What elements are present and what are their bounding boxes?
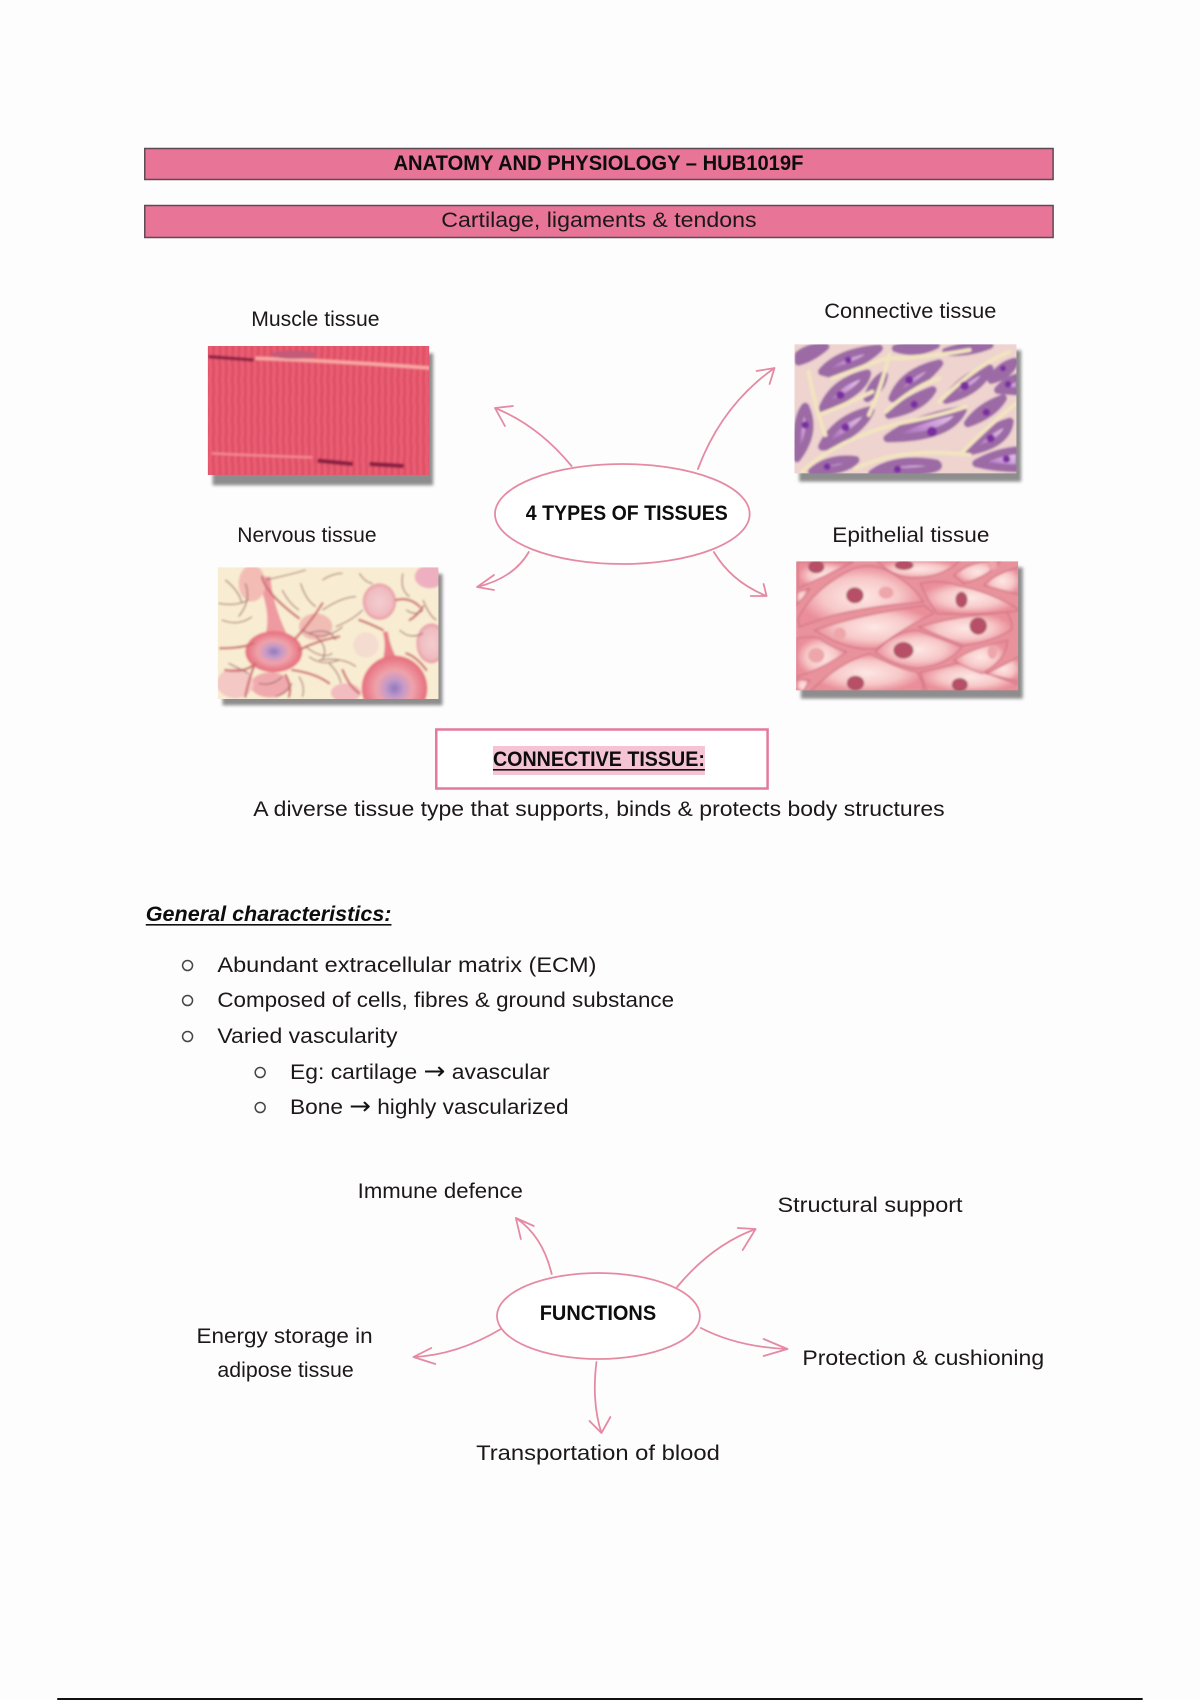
label: muscle tissue: Muscle tissue: [251, 308, 380, 331]
label: transportation of blood: Transportation of blood: [476, 1442, 720, 1465]
label: connective tissue: Connective tissue: [824, 300, 996, 323]
definition text: A diverse tissue type that supports, binds & protects body structures: [253, 798, 945, 821]
bullet: composition: Composed of cells, fibres & ground substance: [217, 989, 674, 1012]
image: connective tissue: [792, 342, 1021, 482]
arrow: to protection: [701, 1328, 787, 1356]
sub-bullet: bone: Bone → highly vascularized: [290, 1092, 569, 1120]
label: structural support: Structural support: [778, 1194, 963, 1217]
label: epithelial tissue: Epithelial tissue: [832, 524, 989, 547]
label: protection and cushioning: Protection & cushioning: [802, 1347, 1044, 1370]
title banner: ANATOMY AND PHYSIOLOGY – HUB1019F: [393, 152, 804, 175]
image: epithelial tissue: [793, 559, 1023, 699]
footer line: [57, 1698, 1143, 1700]
arrow: to structural support: [677, 1228, 756, 1287]
label: energy storage: Energy storage in: [197, 1325, 373, 1348]
list: general characteristics: [183, 954, 674, 1120]
arrow: to muscle tissue: [495, 406, 572, 466]
label: energy storage: adipose tissue: [217, 1359, 354, 1382]
title banner: [145, 148, 1053, 180]
heading box: connective tissue: CONNECTIVE TISSUE:: [493, 748, 705, 771]
bullet: vascularity: Varied vascularity: [217, 1025, 398, 1048]
label: immune defence: Immune defence: [358, 1180, 523, 1203]
center oval: functions: [497, 1273, 700, 1359]
heading box: connective tissue: [436, 730, 768, 788]
arrow: to nervous tissue: [477, 552, 529, 590]
bullet: abundant ECM: Abundant extracellular matrix (ECM): [217, 954, 596, 977]
sub-bullet: cartilage: Eg: cartilage → avascular: [290, 1057, 550, 1085]
arrow: to connective tissue: [698, 368, 775, 469]
image: muscle tissue: [202, 340, 437, 485]
center oval: functions: FUNCTIONS: [540, 1302, 656, 1325]
center oval: 4 types of tissues: 4 TYPES OF TISSUES: [526, 502, 728, 525]
image: nervous tissue: [218, 567, 445, 708]
center oval: 4 types of tissues: [495, 464, 750, 564]
subtitle banner: [145, 206, 1053, 238]
arrow: to immune defence: [516, 1218, 552, 1274]
subtitle banner: Cartilage, ligaments & tendons: [441, 209, 757, 232]
arrow: to epithelial tissue: [714, 552, 767, 596]
label: energy storage: [197, 1325, 373, 1382]
label: nervous tissue: Nervous tissue: [237, 524, 377, 547]
heading: general characteristics: General characteristics:: [146, 903, 392, 926]
arrow: to energy storage: [413, 1329, 501, 1364]
arrow: to transportation: [589, 1362, 610, 1433]
